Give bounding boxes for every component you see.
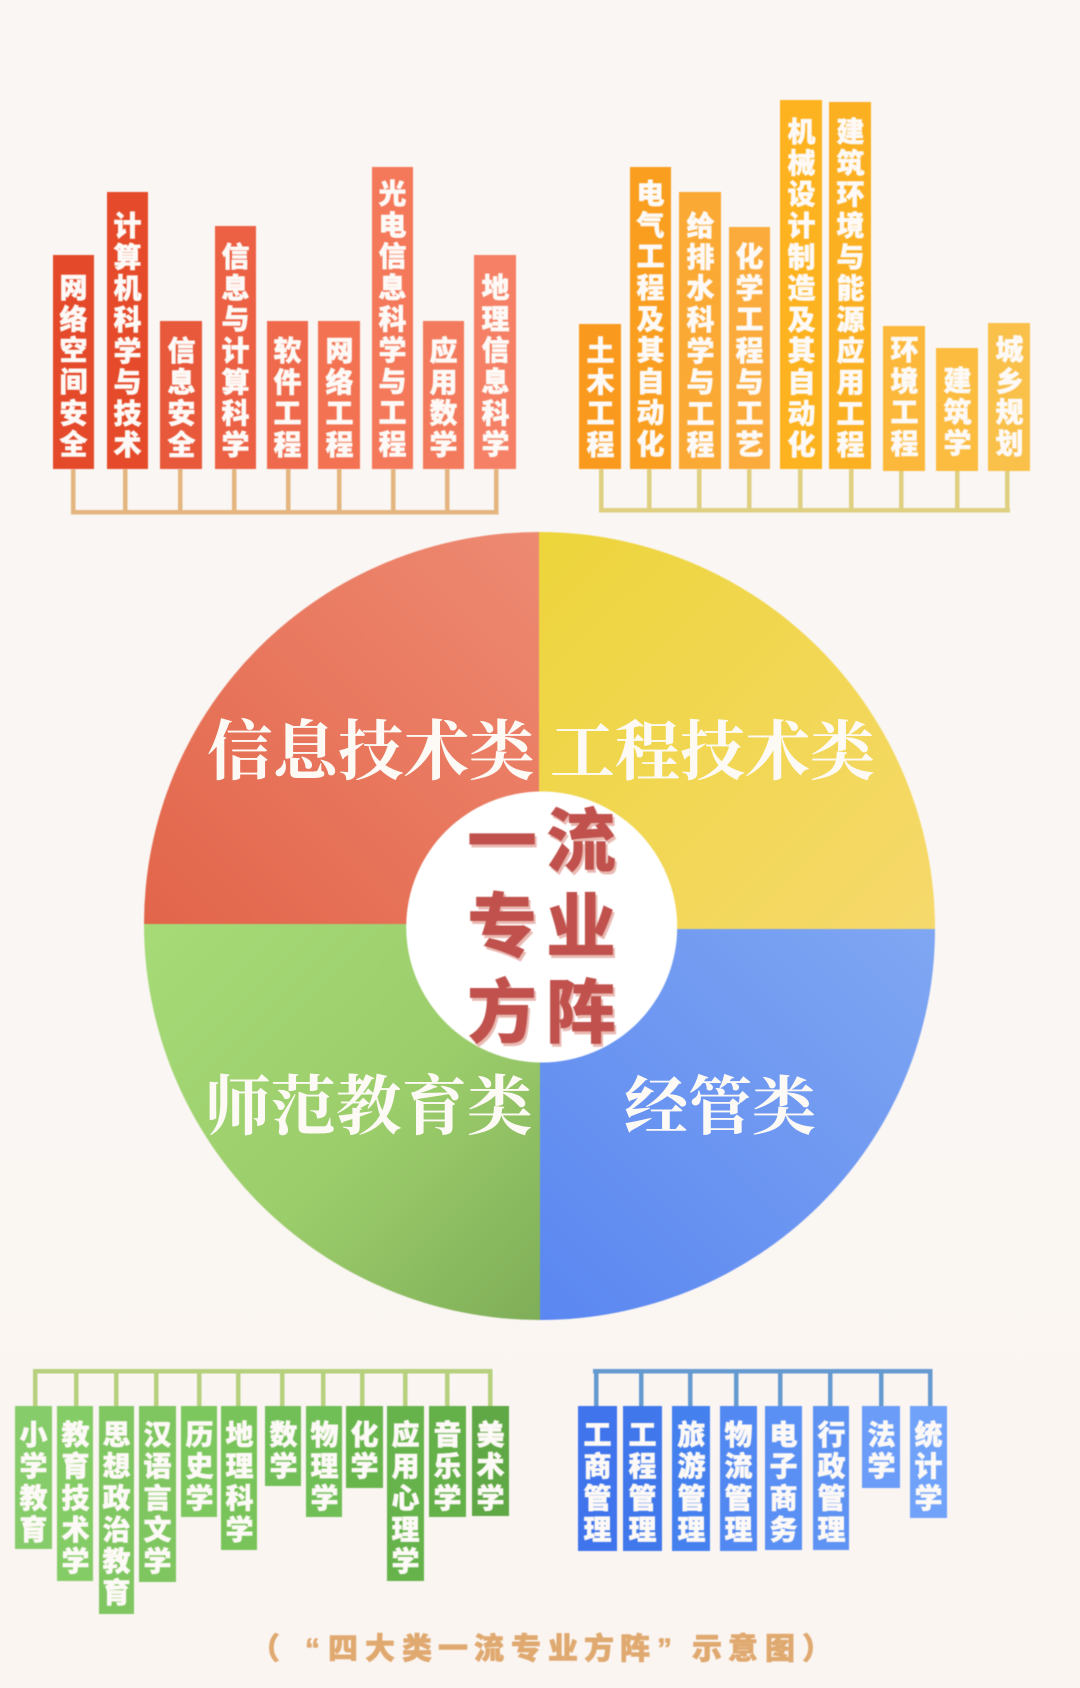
bar: 小学教育: 小学教育 [16, 1420, 48, 1546]
bar: 地理信息科学: 地理信息科学 [478, 273, 510, 461]
bar: 土木工程 [579, 324, 621, 469]
bar: 光电信息科学与工程: 光电信息科学与工程 [376, 179, 406, 461]
bar: 信息安全: 信息安全 [164, 336, 196, 461]
bar: 网络空间安全 [53, 255, 94, 469]
bar: 应用数学 [423, 321, 464, 469]
caption: （“四大类一流专业方阵”示意图） [250, 1632, 832, 1666]
label: 经管类: 经管类 [624, 1072, 816, 1143]
bar: 土木工程: 土木工程 [584, 336, 614, 461]
bar: 软件工程 [267, 321, 308, 469]
bar: 法学: 法学 [864, 1420, 896, 1483]
bar: 建筑学: 建筑学 [940, 366, 972, 460]
bar: 建筑学 [936, 348, 978, 471]
bar: 计算机科学与技术 [107, 192, 148, 469]
bar: 给排水科学与工程 [679, 192, 721, 469]
bar: 软件工程: 软件工程 [270, 336, 302, 461]
bar: 应用心理学: 应用心理学 [388, 1420, 420, 1578]
bar: 汉语言文学: 汉语言文学 [140, 1420, 172, 1578]
bar: 信息与计算科学 [215, 226, 256, 469]
bar: 电子商务: 电子商务 [766, 1420, 798, 1546]
bar: 工程管理: 工程管理 [626, 1420, 656, 1546]
center title: 一流专业方阵: 方 [467, 974, 537, 1052]
quadrant: 经管类 [540, 929, 935, 1320]
bar: 数学 [265, 1406, 301, 1486]
bar: 网络工程: 网络工程 [322, 336, 354, 461]
center title: 一流专业方阵: 流 [546, 803, 616, 881]
bar: 化学工程与工艺: 化学工程与工艺 [732, 242, 764, 461]
bar: 化学 [346, 1406, 383, 1488]
bar: 应用数学: 应用数学 [426, 336, 458, 461]
bar: 地理信息科学 [474, 255, 516, 469]
bar: 化学: 化学 [348, 1420, 378, 1483]
bar: 机械设计制造及其自动化 [780, 100, 822, 469]
bar: 思想政治教育: 思想政治教育 [100, 1420, 130, 1610]
quadrant: 工程技术类 [539, 532, 935, 929]
center circle [406, 792, 677, 1062]
bar: 工商管理: 工商管理 [580, 1420, 612, 1546]
bar: 电气工程及其自动化: 电气工程及其自动化 [634, 179, 664, 461]
bar: 工商管理 [578, 1406, 617, 1551]
center title: 一流专业方阵: 一 [467, 803, 537, 881]
bar: 物理学: 物理学 [308, 1420, 338, 1515]
bar: 历史学: 历史学 [182, 1420, 214, 1515]
bar: 城乡规划 [988, 323, 1030, 471]
center title: 一流专业方阵: 业 [546, 888, 616, 966]
bar: 统计学: 统计学 [912, 1420, 942, 1515]
bar: 建筑环境与能源应用工程: 建筑环境与能源应用工程 [834, 117, 864, 461]
bar: 工程管理 [623, 1406, 662, 1551]
bar: 环境工程: 环境工程 [888, 335, 918, 460]
bar: 法学 [862, 1406, 900, 1488]
bar: 网络空间安全: 网络空间安全 [56, 273, 88, 461]
bar: 计算机科学与技术: 计算机科学与技术 [110, 211, 142, 461]
bar: 给排水科学与工程: 给排水科学与工程 [684, 211, 714, 461]
bar: 网络工程 [318, 321, 360, 469]
quadrant: 信息技术类 [144, 532, 539, 924]
center title: 一流专业方阵: 阵 [546, 974, 616, 1052]
bar: 音乐学: 音乐学 [430, 1420, 462, 1515]
bar: 地理科学: 地理科学 [222, 1420, 254, 1546]
bar: 美术学: 美术学 [474, 1420, 504, 1515]
center title: 一流专业方阵: 专 [467, 888, 537, 966]
bar: 信息与计算科学: 信息与计算科学 [218, 242, 250, 461]
bar: 环境工程 [883, 326, 925, 471]
label: 信息技术类: 信息技术类 [207, 717, 535, 789]
bar: 教育技术学: 教育技术学 [58, 1420, 90, 1578]
bar: 机械设计制造及其自动化: 机械设计制造及其自动化 [784, 117, 816, 461]
bar: 物流管理: 物流管理 [722, 1420, 752, 1546]
bar: 信息安全 [160, 321, 202, 469]
bar: 数学: 数学 [266, 1420, 298, 1483]
bar: 城乡规划: 城乡规划 [992, 335, 1024, 460]
label: 师范教育类: 师范教育类 [205, 1072, 533, 1144]
bar: 行政管理: 行政管理 [814, 1420, 846, 1546]
bar: 化学工程与工艺 [729, 227, 770, 469]
bar: 旅游管理: 旅游管理 [674, 1420, 706, 1546]
quadrant: 师范教育类 [144, 924, 540, 1320]
label: 工程技术类: 工程技术类 [550, 717, 875, 789]
bar: 建筑环境与能源应用工程 [829, 102, 871, 469]
